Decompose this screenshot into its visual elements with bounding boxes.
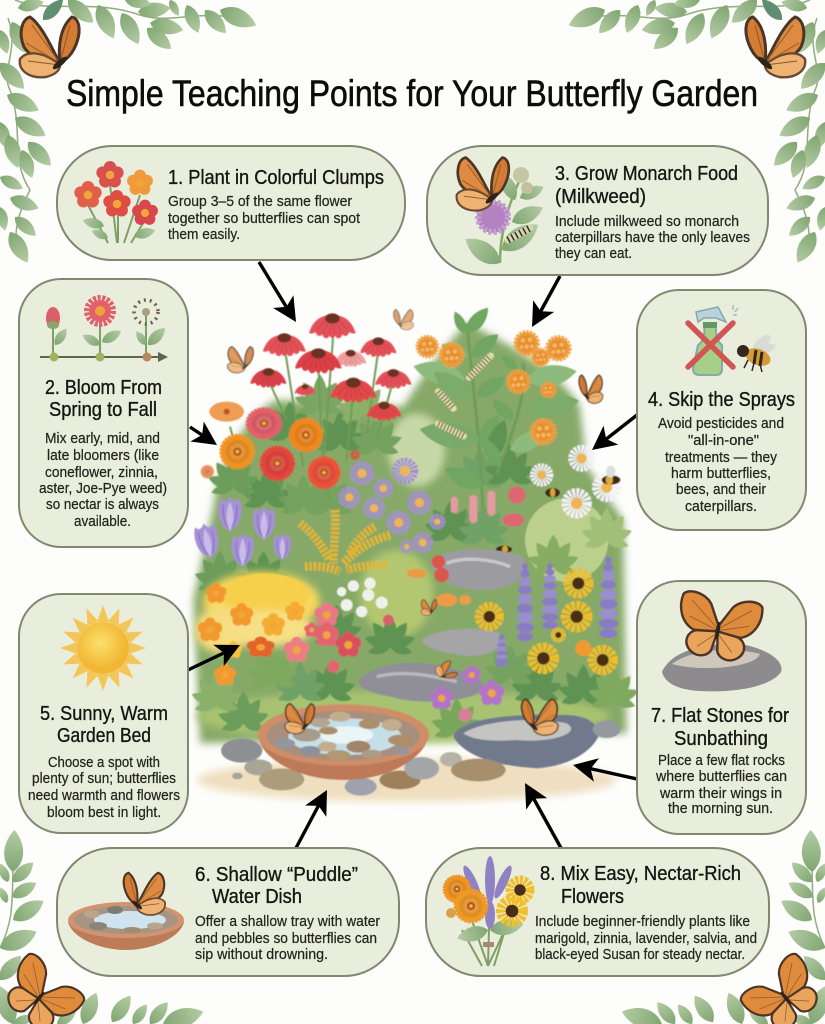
- icon: bouquet: [444, 856, 530, 966]
- orange small flowers: [195, 572, 320, 685]
- white small flowers: [337, 578, 388, 617]
- heading 3: (Milkweed): [555, 185, 646, 208]
- lavender: [495, 556, 618, 667]
- heading 5: Garden Bed: [57, 724, 151, 747]
- heading 7: Sunbathing: [674, 727, 768, 750]
- text 4: treatments — they: [665, 449, 777, 466]
- heading 2: [45, 376, 162, 421]
- foliage: bottom right corner: [619, 830, 825, 1024]
- zinnias: [201, 402, 360, 513]
- text 5: bloom best in light.: [47, 804, 161, 821]
- text 8: Include beginner-friendly plants like: [535, 913, 750, 930]
- text 5: [28, 754, 180, 821]
- heading 8: Flowers: [561, 885, 624, 908]
- foliage: top right corner: [565, 0, 825, 266]
- heading 6: 6. Shallow “Puddle”: [195, 863, 358, 886]
- text 7: [655, 752, 787, 817]
- text 4: caterpillars.: [685, 498, 757, 515]
- text 5: need warmth and flowers: [28, 787, 180, 804]
- text 2: coneflower, zinnia,: [45, 464, 158, 481]
- icon: bloom timeline: [40, 298, 169, 362]
- panel 4: skip the sprays: [637, 290, 806, 530]
- text 2: so nectar is always: [46, 496, 159, 513]
- heading 6: Water Dish: [212, 885, 302, 908]
- text 8: [535, 913, 757, 963]
- text 8: black-eyed Susan for steady nectar.: [535, 946, 745, 963]
- text 2: [39, 430, 167, 530]
- heading 2: 2. Bloom From: [45, 376, 162, 399]
- green leaf clumps: [190, 375, 640, 740]
- coneflowers: [250, 313, 412, 487]
- heading 5: 5. Sunny, Warm: [40, 702, 168, 725]
- stones: path: [358, 549, 525, 702]
- text 4: "all-in-one": [688, 432, 759, 449]
- garden butterflies: [228, 310, 603, 735]
- panel 1: colorful clumps: [57, 146, 405, 260]
- text 4: [658, 415, 784, 515]
- icon: flower clump: [74, 161, 158, 243]
- pink spikes and blooms: [451, 486, 525, 527]
- text 5: plenty of sun; butterflies: [32, 770, 176, 787]
- milkweed plants: [411, 303, 581, 507]
- text 4: bees, and their: [676, 481, 766, 498]
- crocuses: [192, 496, 291, 566]
- border pebbles: [221, 721, 621, 796]
- text 4: Avoid pesticides and: [658, 415, 784, 432]
- text 2: available.: [74, 513, 131, 530]
- purple flowers: [430, 665, 504, 722]
- pink flower cluster: [284, 555, 471, 673]
- text 3: caterpillars have the only leaves: [555, 229, 750, 246]
- text 6: [195, 913, 380, 963]
- panel 2: bloom from spring to fall: [19, 279, 188, 547]
- icon: crossed spray bottle and bee: [688, 305, 777, 375]
- panel 7: flat stones: [637, 581, 806, 834]
- icon: sun: [60, 605, 146, 691]
- heading 5: [40, 702, 168, 747]
- text 7: where butterflies can: [655, 768, 787, 785]
- text 1: them easily.: [168, 226, 240, 243]
- foliage: bottom left corner: [0, 830, 206, 1024]
- text 1: [168, 193, 361, 243]
- panel 5: sunny garden bed: [19, 594, 188, 833]
- text 3: [555, 213, 750, 262]
- text 7: the morning sun.: [668, 800, 773, 817]
- text 5: Choose a spot with: [48, 754, 160, 771]
- text 6: sip without drowning.: [195, 946, 328, 963]
- heading 8: 8. Mix Easy, Nectar-Rich: [540, 862, 741, 885]
- text 2: aster, Joe-Pye weed): [39, 480, 167, 497]
- goldenrod: [300, 510, 390, 572]
- panel 6: puddle water dish: [57, 848, 399, 976]
- daisies and bees: [496, 449, 620, 553]
- black-eyed susans: [479, 573, 613, 670]
- large basking stone: [453, 715, 598, 768]
- butterfly: top left: [20, 17, 79, 77]
- text 8: marigold, zinnia, lavender, salvia, and: [535, 930, 757, 947]
- caterpillars: [438, 356, 491, 436]
- heading 7: 7. Flat Stones for: [651, 704, 789, 727]
- panel 8: nectar-rich flowers: [426, 848, 769, 976]
- text 3: Include milkweed so monarch: [555, 213, 739, 230]
- heading 8: [540, 862, 741, 908]
- heading 4: 4. Skip the Sprays: [648, 388, 795, 411]
- icon: shallow dish with butterfly: [68, 873, 184, 950]
- ground and foliage mass: [193, 323, 627, 802]
- heading 3: [555, 162, 738, 208]
- butterfly: bottom left: [0, 951, 87, 1024]
- heading 7: [651, 704, 789, 750]
- foliage: top left corner: [0, 0, 260, 266]
- heading 3: 3. Grow Monarch Food: [555, 162, 738, 185]
- text 4: harm butterflies,: [671, 465, 771, 482]
- asters: [342, 462, 443, 551]
- text 6: Offer a shallow tray with water: [195, 913, 380, 930]
- icon: butterfly on flat rock: [662, 590, 782, 691]
- water dish: [258, 704, 429, 780]
- icon: milkweed and monarch: [457, 158, 546, 271]
- text 1: together so butterflies can spot: [168, 210, 361, 227]
- text 1: Group 3–5 of the same flower: [168, 193, 352, 210]
- heading 1: 1. Plant in Colorful Clumps: [168, 166, 384, 189]
- arrows: [188, 262, 637, 848]
- text 7: Place a few flat rocks: [658, 752, 785, 769]
- text 7: warm their wings in: [659, 785, 782, 802]
- garden illustration: [190, 303, 640, 802]
- text 2: Mix early, mid, and: [45, 430, 160, 447]
- panel 3: monarch food: [427, 146, 768, 275]
- text 2: late bloomers (like: [47, 447, 159, 464]
- text 6: and pebbles so butterflies can: [195, 930, 377, 947]
- text 3: they can eat.: [555, 245, 632, 262]
- heading 6: [195, 863, 358, 908]
- heading 2: Spring to Fall: [49, 398, 157, 421]
